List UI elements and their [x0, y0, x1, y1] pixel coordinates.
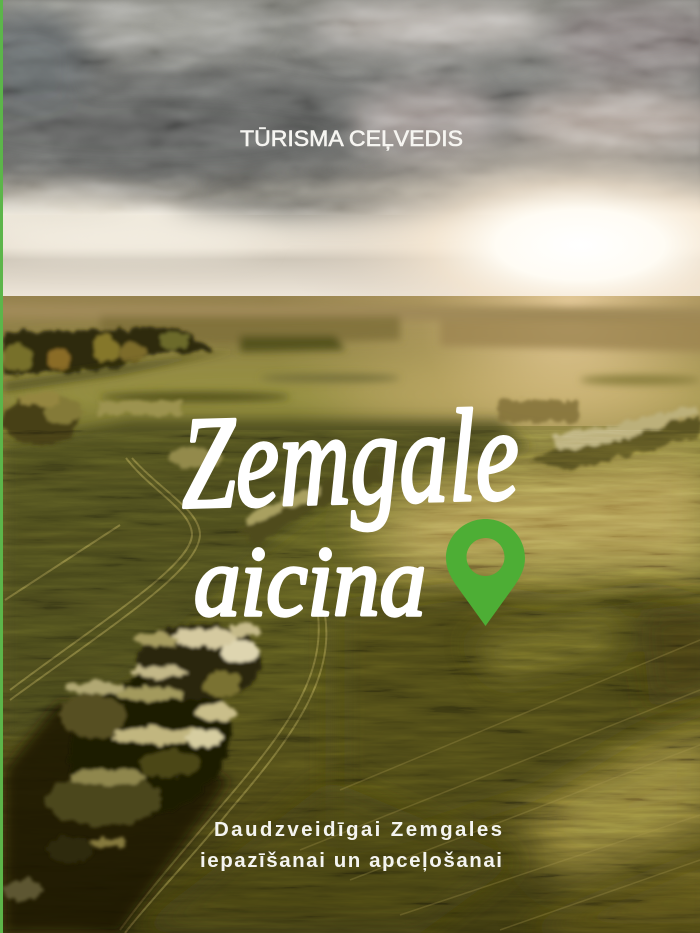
- mid hedge behind title: [168, 448, 385, 545]
- field furrow texture: [0, 430, 700, 933]
- dark field band: [4, 420, 530, 745]
- shaded tree shadow: [4, 700, 230, 933]
- heading: Tūrisma ceļvedis: TŪRISMA CEĻVEDIS: [240, 126, 463, 151]
- field stripes far: [4, 350, 700, 402]
- right field furrow lines: [300, 640, 700, 930]
- golden light on fields: [280, 359, 700, 902]
- title: Zemgale aicina: aicina: [194, 526, 426, 637]
- green left edge line: [0, 0, 3, 933]
- horizon glow: [330, 296, 700, 426]
- tree cluster: [2, 623, 262, 901]
- distant forest: [0, 303, 700, 352]
- land base: [0, 296, 700, 933]
- forest left: [3, 326, 215, 376]
- title: Zemgale aicina: [179, 381, 521, 637]
- subtitle: Daudzveidīgai Zemgales: [214, 818, 502, 841]
- land: [0, 296, 700, 933]
- subtitle: iepazīšanai un apceļošanai: [200, 849, 502, 872]
- hedgerow right: [498, 400, 700, 470]
- title: Zemgale aicina: Zemgale: [179, 381, 521, 536]
- shadow on right field: [336, 576, 700, 808]
- clouds: [0, 0, 700, 252]
- subtitle: [200, 818, 502, 872]
- sky: [0, 0, 700, 298]
- field tracks: [5, 458, 326, 933]
- icon: green map pin: [446, 519, 525, 626]
- bush left: [2, 392, 183, 445]
- cloud texture: [0, 0, 700, 215]
- sun glow: [320, 133, 700, 296]
